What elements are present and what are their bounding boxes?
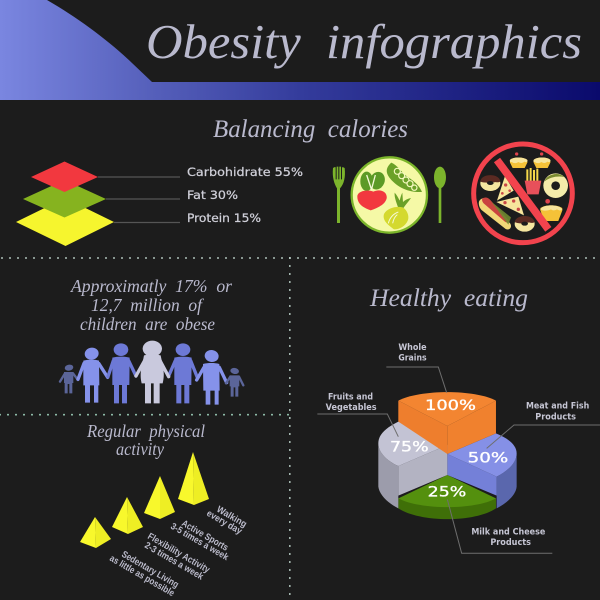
spoon (434, 167, 446, 223)
cupcake bottom right (540, 199, 562, 221)
layer: fat (23, 180, 106, 218)
label: whole grains: Grains (398, 354, 427, 364)
adult far right (197, 349, 227, 405)
value: 75%: 75% (390, 439, 429, 455)
label: milk and cheese: Milk and Cheese (471, 527, 545, 537)
label: fruits and vegetables (326, 392, 377, 413)
value: 50%: 50% (468, 451, 508, 467)
label: fruits and vegetables: Fruits and (328, 392, 373, 402)
icon: no junk food sign (474, 144, 572, 243)
label: sedentary: Sedentary Living (120, 549, 181, 591)
heading: regular physical activity: Regular physical (86, 421, 205, 441)
segment: fruits and vegetables (378, 422, 447, 508)
donut bottom (515, 216, 535, 232)
value: 100%: 100% (425, 398, 476, 414)
heading: children statistic: Approximatly 17% or (70, 276, 233, 296)
pizza slices (497, 176, 514, 201)
label: meat and fish (526, 402, 589, 422)
label: active sports: Active Sports (180, 518, 230, 554)
label: flexibility: Flexibility Activity (146, 531, 212, 576)
child right (226, 367, 243, 397)
heading: regular physical activity (86, 421, 205, 459)
heading: regular physical activity: activity (116, 439, 164, 459)
label: flexibility: 2-3 times a week (142, 540, 206, 583)
heading: children statistic: children are obese (80, 314, 215, 334)
icon: healthy plate with fork and spoon (333, 157, 446, 233)
label: whole grains (398, 343, 427, 364)
adult left (108, 343, 136, 403)
label: protein: Protein 15% (187, 211, 261, 225)
header banner (0, 0, 600, 100)
pea pod (387, 163, 422, 192)
layer: carbohydrate (31, 162, 98, 192)
donut right (543, 173, 568, 198)
layered macronutrient diagram (16, 162, 303, 246)
label: whole grains: Whole (398, 343, 427, 353)
activity pyramids (80, 452, 209, 548)
segment: meat and fish (447, 433, 517, 508)
adult far left (78, 347, 108, 403)
pyramid: flexibility (112, 497, 143, 534)
heading: children statistic (70, 276, 233, 334)
cupcake left (510, 152, 527, 168)
child left (60, 364, 78, 393)
value: 25%: 25% (428, 485, 466, 501)
heading: children statistic: 12,7 million of (91, 295, 205, 315)
3D pie chart (317, 343, 600, 553)
label: fat: Fat 30% (187, 188, 238, 202)
central woman (136, 341, 169, 403)
heading: healthy eating: Healthy eating (369, 285, 528, 312)
label: milk and cheese (471, 527, 545, 548)
segment: milk and cheese (398, 475, 496, 519)
fork (333, 167, 345, 223)
segment: whole grains (398, 392, 496, 454)
pyramid: walking (178, 452, 209, 505)
label: walking: Walking (214, 504, 249, 530)
adult right (169, 343, 197, 403)
label: carbohydrate: Carbohidrate 55% (187, 165, 303, 179)
pyramid: active sports (144, 476, 175, 519)
heading: balancing calories: Balancing calories (213, 116, 408, 143)
label: active sports: 3-5 times a week (168, 521, 231, 563)
beet (357, 170, 387, 210)
label: walking: every day (204, 508, 244, 537)
people group (60, 341, 243, 405)
plate (352, 157, 427, 233)
label: fruits and vegetables: Vegetables (326, 403, 377, 413)
label: meat and fish: Meat and Fish (526, 402, 589, 412)
layer: protein (16, 198, 114, 246)
cupcake right (533, 152, 550, 168)
hot dog (479, 197, 511, 230)
turnip (384, 193, 411, 229)
title: Obesity infographics (146, 14, 582, 69)
donut left (480, 175, 500, 191)
pyramid: sedentary (80, 517, 111, 548)
fries (525, 168, 541, 194)
label: meat and fish: Products (535, 412, 576, 422)
prohibition slash (497, 160, 548, 229)
prohibition ring (474, 144, 572, 243)
label: milk and cheese: Products (490, 538, 531, 548)
